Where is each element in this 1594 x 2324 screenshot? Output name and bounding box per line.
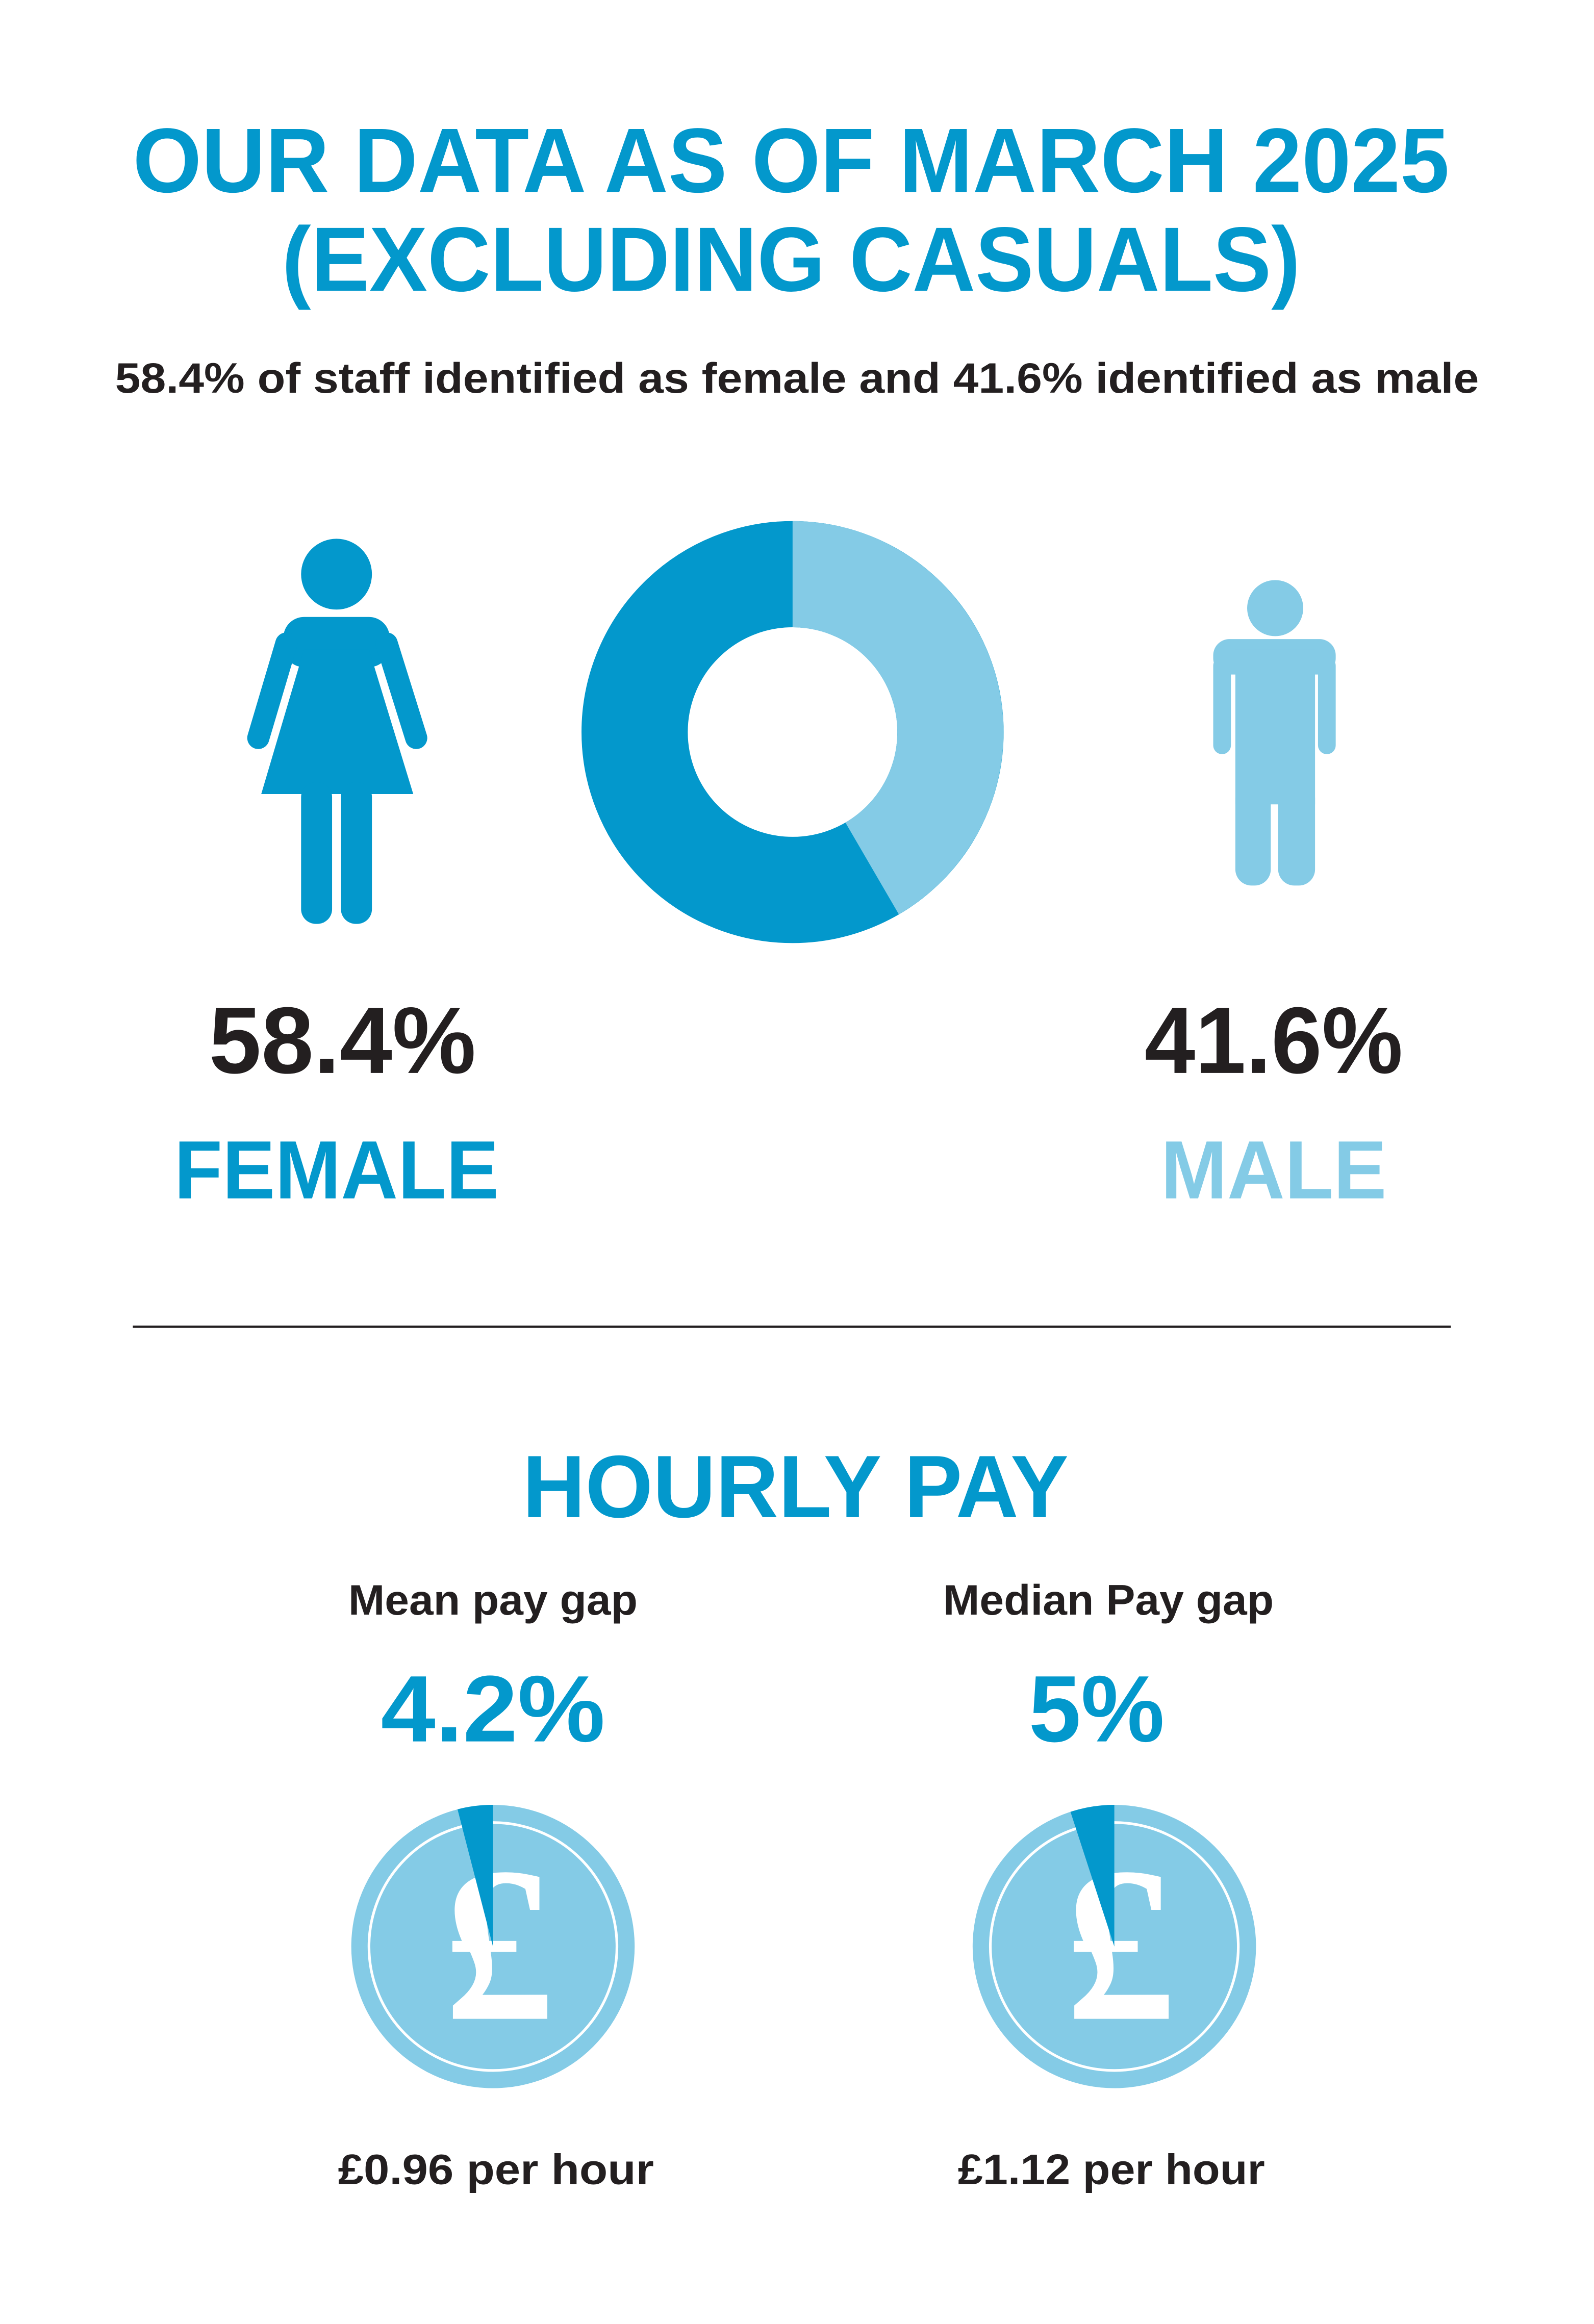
panel: median pay gap: 5% [1029, 1656, 1165, 1762]
icon: female figure [258, 539, 416, 924]
male stat: 41.6% [1145, 988, 1403, 1093]
donut chart [635, 521, 1003, 914]
title: (EXCLUDING CASUALS) [282, 209, 1300, 311]
panel: median pay gap: Median Pay gap [943, 1576, 1274, 1624]
icon: coin median [973, 1805, 1256, 2088]
icon: coin median: £ [1065, 1822, 1176, 2067]
panel: mean pay gap [338, 1576, 654, 2193]
heading: hourly pay: HOURLY PAY [522, 1437, 1069, 1536]
panel: mean pay gap: £0.96 per hour [338, 2146, 654, 2193]
icon: coin mean: £ [444, 1822, 554, 2067]
panel: mean pay gap: Mean pay gap [348, 1576, 638, 1624]
panel: median pay gap [943, 1576, 1274, 2193]
female stat [174, 988, 499, 1216]
male stat [1145, 988, 1403, 1216]
subtitle: 58.4% of staff identified as female and 41.6% identified as male [115, 354, 1479, 402]
panel: mean pay gap: 4.2% [381, 1656, 605, 1762]
male stat: MALE [1161, 1124, 1386, 1216]
icon: coin mean [351, 1805, 635, 2088]
female stat: 58.4% [209, 988, 476, 1093]
panel: median pay gap: £1.12 per hour [958, 2146, 1265, 2193]
title [133, 110, 1449, 311]
title: OUR DATA AS OF MARCH 2025 [133, 110, 1449, 212]
female stat: FEMALE [174, 1124, 499, 1216]
icon: male figure [1213, 580, 1336, 885]
